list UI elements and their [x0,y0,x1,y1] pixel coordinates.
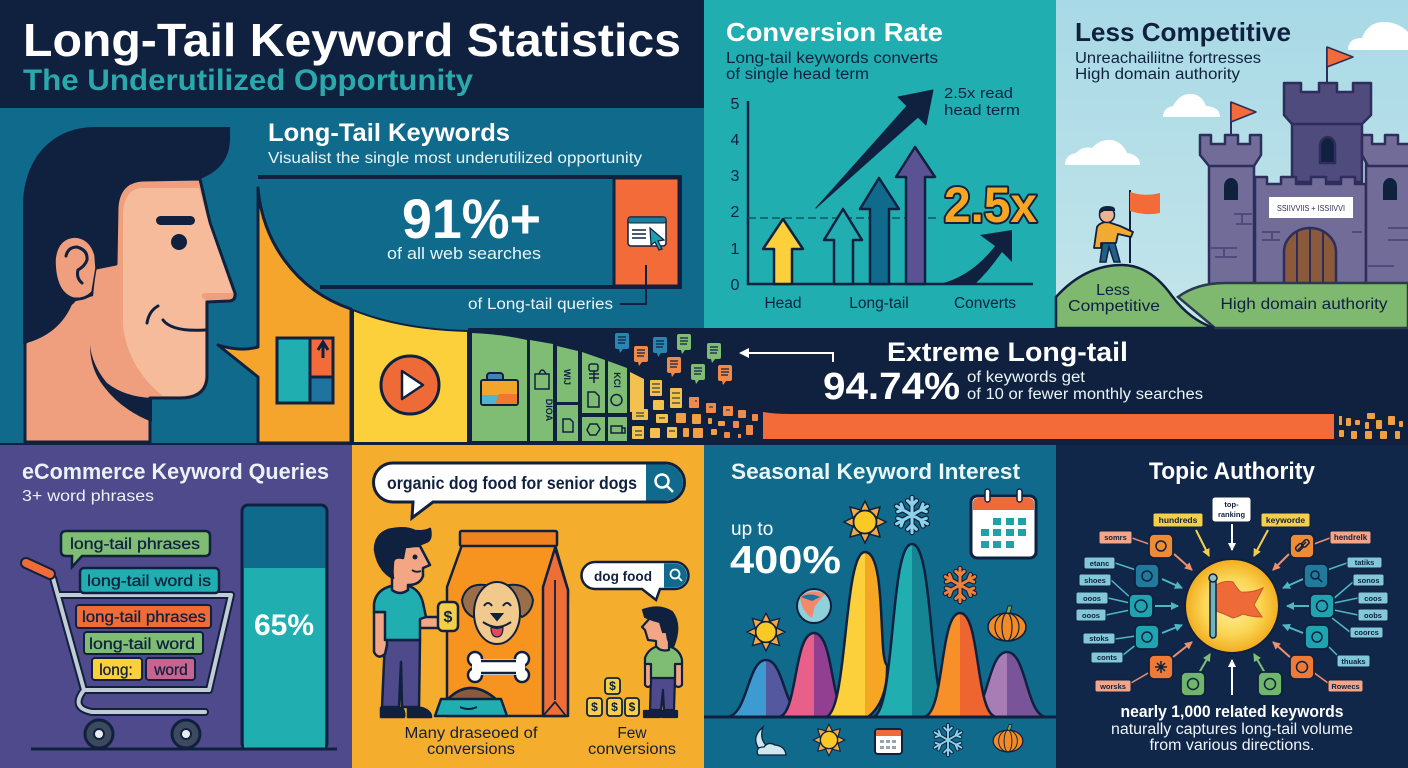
shirt [374,586,426,640]
connector lines [1106,538,1358,683]
tag: long-tail phrases orange [76,605,211,628]
keyword tag labels: oobs [1364,611,1382,620]
tag: long-tail word: long-tail word [89,636,195,653]
scattered keyword docs [1339,413,1403,439]
panel: dog food search comparison [352,445,704,768]
head [392,546,430,593]
keyword tag labels: somrs [1104,533,1127,542]
keyword tag labels: ooos [1082,611,1100,620]
keyword tags [1076,497,1388,692]
keyword tag labels: top- [1224,500,1239,509]
icon: snowflake blue inner [897,497,927,533]
hill labels: Less [1096,282,1130,299]
keyword tag labels: sonos [1357,576,1380,585]
keyword tag labels: hendrelk [1334,533,1368,542]
search bar: organic dog food [374,463,685,518]
x axis labels: Long-tail [849,295,909,312]
coin stack: $ [611,700,618,714]
keyword tag labels: tatiks [1355,558,1374,567]
bar arrow: long-tail blue [860,178,899,284]
icon boxes [1129,534,1334,696]
illustration: person with flag [1094,190,1160,263]
icons: small segment glyphs [535,364,625,435]
heading: Seasonal Keyword Interest [731,459,1021,484]
heading: conversion rate: Conversion Rate [726,17,943,47]
search bar: dog food: dog food [594,568,652,584]
bar: 65%: 65% [254,609,314,642]
description: High domain authority [1075,66,1240,83]
panel: less competitive [1056,0,1408,328]
hill labels: High domain authority [1220,296,1388,313]
center circle with flag [1185,559,1279,653]
y axis labels: 0 [731,277,740,294]
arrow pointing to tail [739,348,833,362]
hill: high domain authority [1178,283,1408,328]
heading: Topic Authority [1149,458,1316,485]
x axis labels: Head [764,295,802,312]
description: Long-tail keywords converts [726,50,938,67]
caption: many conversions: Many draseoed of [404,725,538,742]
dog food bag [447,531,568,716]
coin stack [587,678,639,716]
keyword tag labels: etanc [1090,559,1109,568]
y axis labels: 2 [731,204,740,221]
segment: small yellow [630,372,644,412]
tail chart: keyword distribution [218,188,758,443]
stat label: of all web searches [387,244,541,263]
summary text: from various directions. [1150,737,1314,754]
shopping cart [26,563,231,748]
label: of long-tail queries: of Long-tail queries [468,296,613,313]
dog face [462,582,533,644]
tag: long: long: [99,662,133,679]
curved arrow [940,230,1012,284]
stat label: of keywords get [967,369,1086,386]
tag: long-tail word is: long-tail word is [87,573,211,590]
search bar: dog food [582,562,688,600]
icon box glyphs [1135,539,1328,690]
icon: calendar [971,489,1036,558]
keyword tag labels: Rowecs [1331,682,1360,691]
tag: long-tail word is [80,568,219,593]
tag: long-tail phrases green: long-tail phrases [70,536,200,553]
icon: globe [797,589,831,623]
peak: teal [872,544,952,717]
face details [412,570,421,572]
peak: yellow [825,552,887,717]
segments: green mid tail [472,333,627,441]
tag: long-tail word [84,632,203,654]
panel: ecommerce keyword queries [0,445,352,768]
connector line [620,265,646,304]
icon: pumpkin [988,606,1026,641]
heading: less competitive: Less Competitive [1075,17,1291,47]
panel: conversion rate [704,0,1056,328]
rotated glyph labels: DIOA [544,399,554,422]
bone [468,652,529,682]
caption: many conversions: conversions [427,741,515,758]
subtitle: The Underutilized Opportunity [23,64,473,97]
stat label: of 10 or fewer monthly searches [967,386,1203,403]
peak: orange [923,613,997,717]
hair [23,127,230,344]
y axis labels: 3 [731,168,740,185]
keyword tag labels: coos [1364,594,1382,603]
chart: conversion arrows [731,85,1037,312]
icon: snowflake blue [897,497,927,533]
heading: extreme long-tail: Extreme Long-tail [887,337,1128,367]
coin stack: $ [609,679,616,693]
subheading: 3+ word phrases [22,488,154,505]
eye [171,234,187,250]
tag: word [146,658,195,680]
peak: purple [967,652,1047,717]
jaw shadow [90,345,152,422]
keyword tag labels [1082,500,1382,691]
icon: snowflake orange [945,568,975,602]
icon: briefcase [481,373,518,405]
x axis labels: Converts [954,295,1016,312]
face highlight [123,188,233,396]
stat: 94.74%: 94.74% [823,366,960,408]
stat label: up to: up to [731,519,773,540]
bottom icon row [756,724,1023,756]
summary text: nearly 1,000 related keywords [1120,703,1344,721]
stat: 400%: 400% [730,539,841,582]
rotated glyph labels: KCI [612,372,622,388]
ear [55,237,96,298]
peak: pink [778,633,850,717]
y axis labels: 1 [731,241,740,258]
arrow label: head term [944,102,1020,119]
coin stack: $ [629,700,636,714]
caption: few conversions: conversions [588,741,676,758]
hill labels: Competitive [1068,298,1160,315]
tag: word: word [153,662,188,679]
keyword tag labels: hundreds [1159,515,1198,525]
panel: extreme long-tail [739,337,1403,439]
ground line [31,748,337,750]
food bowl [435,688,507,716]
keyword tag labels: shoes [1084,576,1106,585]
illustration: man's head in profile [23,127,235,442]
bar: 65% [242,505,327,749]
callout box: 91%+ [258,177,680,287]
icon: sun large [844,501,886,543]
coin symbol: $ [444,609,453,626]
keyword tag labels: conts [1097,653,1117,662]
keyword tag labels: ranking [1218,510,1245,519]
bar: long tail volume [763,412,1334,439]
segment: orange head [218,188,351,443]
y axis labels: 4 [731,132,740,149]
clouds [1065,22,1408,165]
neck and head base [25,179,235,442]
caption: few conversions: Few [617,725,647,742]
smile and cheek [147,306,205,330]
keyword tag labels: thuaks [1341,657,1366,666]
hair [375,528,430,578]
icon: play button [381,356,439,414]
stat: 2.5x: 2.5x [944,177,1037,233]
nose shade [202,293,233,299]
castle sign: SSIIVVIIS + ISSIIVVI [1277,204,1345,213]
legs [382,640,420,707]
icon: snowflake orange inner [945,568,975,602]
panel: seasonal keyword interest [704,445,1056,768]
illustration: castle [1200,47,1408,284]
subheading: Visualist the single most underutilized opportunity [268,150,642,167]
title banner [0,0,704,108]
keyword tag labels: ooos [1083,594,1101,603]
icon: bar blocks [277,338,333,403]
man's eye [412,554,418,560]
segment: yellow [353,310,468,443]
shoes [381,708,431,717]
tag: long-tail phrases orange: long-tail phrases [82,609,206,626]
stat: 91%+: 91%+ [402,187,541,250]
bar arrow: long-tail outline [824,209,862,284]
rotated glyph labels: WIJ [562,369,572,385]
summary text: naturally captures long-tail volume [1111,721,1353,738]
hill: less competitive [1056,265,1214,328]
brow [156,216,195,225]
icon: sun [747,613,785,651]
heading: long-tail keywords: Long-Tail Keywords [268,119,510,147]
small keyword documents [632,380,758,439]
bar arrow: head [763,219,803,284]
arm [374,612,387,657]
bar arrow: purple [896,147,935,284]
panel: topic authority [1056,445,1408,768]
arrows to center [1155,524,1309,695]
panel: long-tail keywords [0,108,1408,445]
speech bubbles [615,333,732,385]
description: of single head term [726,66,869,83]
y axis labels [731,96,740,294]
rotated glyph labels [544,369,622,422]
peak: blue [726,660,806,717]
keyword tag labels: worsks [1099,682,1126,691]
x axis labels [764,295,1016,312]
tag: long [92,658,142,680]
large trend arrow [816,90,933,208]
keyword tag labels: stoks [1089,634,1109,643]
man with coin [374,528,458,717]
chart: seasonal peaks [704,544,1056,717]
y axis labels: 5 [731,96,740,113]
description: Unreachailiitne fortresses [1075,50,1261,67]
main title: Long-Tail Keyword Statistics [23,14,681,66]
heading: eCommerce Keyword Queries [22,459,329,484]
arrow label: 2.5x read [944,85,1013,102]
small person [642,607,682,717]
keyword tag labels: coorcs [1354,628,1379,637]
castle sign [1269,197,1353,218]
keyword tag labels: keywordе [1266,515,1305,525]
icon: browser cursor [628,217,666,250]
tag: long-tail phrases green [61,531,210,567]
coin stack: $ [591,700,598,714]
hill labels [1068,282,1388,315]
search bar: organic dog food: organic dog food for senior dogs [387,473,637,493]
